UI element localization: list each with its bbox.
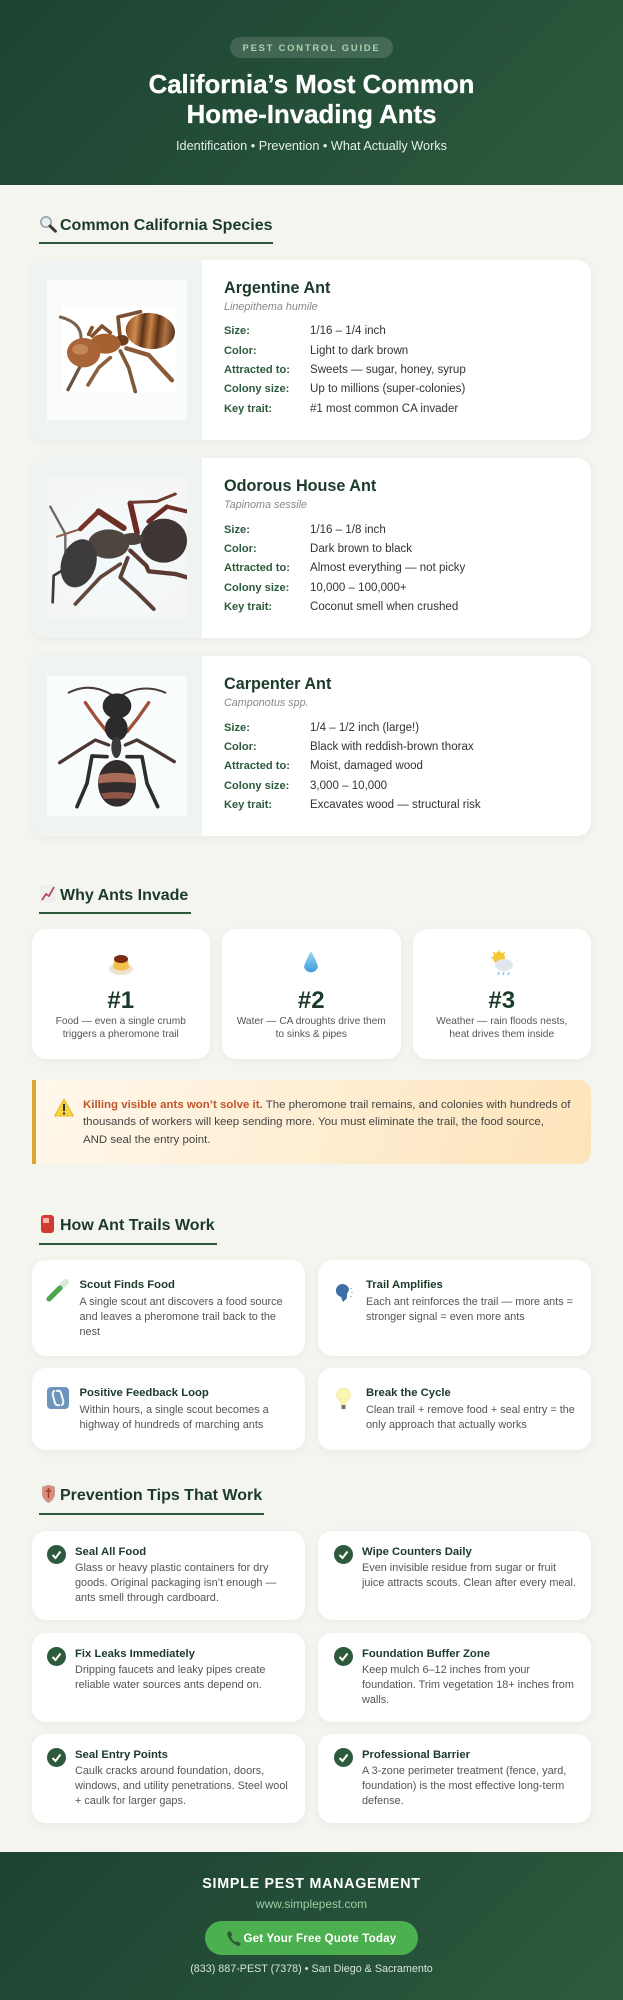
species card: argentine ant bbox=[32, 260, 591, 440]
facts: color: Color: bbox=[224, 344, 257, 356]
reason text bbox=[56, 1016, 186, 1040]
reason text bbox=[236, 1016, 386, 1040]
icon: sun behind rain cloud bbox=[491, 950, 513, 976]
button text: Get Your Free Quote Today bbox=[244, 1932, 396, 1945]
ant illustration: odorous house ant bbox=[49, 492, 187, 612]
facts: attracted to: Attracted to: bbox=[224, 760, 290, 772]
icon: check bbox=[47, 1545, 66, 1564]
species card: odorous house ant bbox=[32, 458, 591, 638]
facts: key trait: Key trait: bbox=[224, 601, 272, 613]
icon: check bbox=[334, 1545, 353, 1564]
step text: only approach that actually works bbox=[366, 1419, 527, 1431]
scientific name: Linepithema humile bbox=[224, 300, 318, 312]
step text: A single scout ant discovers a food source bbox=[80, 1296, 283, 1308]
step text: Within hours, a single scout becomes a bbox=[80, 1404, 269, 1416]
warning text: AND seal the entry point. bbox=[83, 1134, 210, 1146]
company name: SIMPLE PEST MANAGEMENT bbox=[202, 1876, 421, 1892]
tip text bbox=[362, 1562, 576, 1589]
title: California’s Most Common bbox=[149, 71, 474, 99]
icon: check bbox=[47, 1748, 66, 1767]
tip text: goods. Original packaging isn’t enough — bbox=[75, 1577, 276, 1589]
value: Black with reddish-brown thorax bbox=[310, 741, 474, 753]
icon: chart bbox=[40, 885, 56, 902]
tip text: A 3-zone perimeter treatment (fence, yard, bbox=[362, 1764, 566, 1776]
species card: carpenter ant bbox=[32, 656, 591, 836]
value: Moist, damaged wood bbox=[310, 760, 423, 772]
tip text: + caulk for larger gaps. bbox=[75, 1795, 186, 1807]
tip text: Keep mulch 6–12 inches from your bbox=[362, 1664, 530, 1676]
section heading: prevention tips that work bbox=[39, 1484, 264, 1514]
scientific name: Camponotus spp. bbox=[224, 697, 309, 709]
step text: Clean trail + remove food + seal entry = the bbox=[366, 1404, 575, 1416]
tip text: Dripping faucets and leaky pipes create bbox=[75, 1664, 265, 1676]
facts: color: Color: bbox=[224, 543, 257, 555]
step card: scout finds food bbox=[32, 1260, 305, 1356]
section heading: why ants invade bbox=[39, 884, 190, 914]
reason text: Food — even a single crumb bbox=[56, 1016, 186, 1027]
tip text: juice attracts scouts. Clean after every meal. bbox=[362, 1577, 576, 1589]
icon: loop button bbox=[47, 1387, 69, 1409]
value: Coconut smell when crushed bbox=[310, 601, 458, 613]
step title: Break the Cycle bbox=[366, 1387, 451, 1399]
badge: pest control guide bbox=[230, 37, 393, 58]
contact details: (833) 887-PEST (7378) • San Diego & Sacramento bbox=[190, 1963, 433, 1975]
step text: nest bbox=[80, 1326, 100, 1338]
icon: water drop bbox=[304, 951, 318, 972]
subtitle: Identification • Prevention • What Actually Works bbox=[176, 139, 447, 153]
step card: positive feedback loop bbox=[32, 1368, 305, 1450]
step text: stronger signal = even more ants bbox=[366, 1311, 525, 1323]
icon: red alarm bbox=[41, 1215, 54, 1233]
footer bbox=[0, 1852, 623, 2000]
tip title: Professional Barrier bbox=[362, 1748, 470, 1760]
tip text: Glass or heavy plastic containers for dry bbox=[75, 1562, 268, 1574]
tip title: Fix Leaks Immediately bbox=[75, 1648, 195, 1660]
step text bbox=[80, 1404, 269, 1431]
facts: size: Size: bbox=[224, 722, 250, 734]
section heading: common california species bbox=[39, 214, 273, 244]
facts: attracted to: Attracted to: bbox=[224, 562, 290, 574]
tip text: Even invisible residue from sugar or fruit bbox=[362, 1562, 556, 1574]
ant illustration: argentine ant bbox=[47, 280, 187, 420]
value: Excavates wood — structural risk bbox=[310, 799, 481, 811]
facts: size: Size: bbox=[224, 325, 250, 337]
value: Sweets — sugar, honey, syrup bbox=[310, 364, 466, 376]
tip card: seal all food bbox=[32, 1530, 305, 1620]
reason text: heat drives them inside bbox=[449, 1028, 554, 1040]
icon: shield bbox=[42, 1485, 55, 1503]
reason card: food bbox=[32, 929, 210, 1059]
call to action button bbox=[204, 1921, 418, 1955]
icon: warning triangle bbox=[54, 1098, 74, 1116]
heading text: Prevention Tips That Work bbox=[60, 1487, 262, 1504]
tip text bbox=[75, 1764, 288, 1807]
image panel bbox=[32, 458, 202, 638]
rank: #2 bbox=[298, 987, 325, 1014]
facts: colony size: Colony size: bbox=[224, 780, 289, 792]
tip card: fix leaks immediately bbox=[32, 1632, 305, 1722]
facts: color: Color: bbox=[224, 741, 257, 753]
icon: custard bbox=[109, 955, 133, 975]
badge: pest control guide: PEST CONTROL GUIDE bbox=[243, 42, 380, 53]
icon: magnifying glass bbox=[40, 216, 57, 233]
icon: check bbox=[334, 1748, 353, 1767]
heading text: Common California Species bbox=[60, 216, 272, 234]
icon: speaking head bbox=[336, 1284, 353, 1302]
tip text bbox=[362, 1764, 566, 1807]
step title: Positive Feedback Loop bbox=[80, 1387, 209, 1399]
rank: #1 bbox=[107, 987, 134, 1014]
tip card: seal entry points bbox=[32, 1734, 305, 1823]
warning text bbox=[83, 1098, 570, 1146]
heading text: How Ant Trails Work bbox=[60, 1217, 215, 1234]
warning text: Killing visible ants won’t solve it. The pheromone trail remains, and colonies with hundreds of bbox=[83, 1098, 570, 1110]
reason text bbox=[436, 1016, 567, 1040]
tip text: windows, and utility penetrations. Steel wool bbox=[75, 1780, 288, 1792]
scientific name: Tapinoma sessile bbox=[224, 499, 307, 511]
tip text: ants smell through cardboard. bbox=[75, 1592, 219, 1604]
value: Light to dark brown bbox=[310, 344, 408, 356]
reason card: weather bbox=[412, 929, 591, 1059]
value: 10,000 – 100,000+ bbox=[310, 582, 407, 594]
facts: colony size: Colony size: bbox=[224, 383, 289, 395]
website: www.simplepest.com bbox=[256, 1897, 367, 1911]
ant name: Argentine Ant bbox=[224, 278, 330, 296]
facts: colony size: Colony size: bbox=[224, 582, 289, 594]
tip text: reliable water sources ants depend on. bbox=[75, 1679, 262, 1691]
image panel bbox=[32, 656, 202, 836]
step text bbox=[366, 1404, 575, 1431]
icon: phone bbox=[227, 1931, 241, 1946]
tip title: Wipe Counters Daily bbox=[362, 1546, 472, 1558]
reason text: Weather — rain floods nests, bbox=[436, 1016, 567, 1027]
tip title: Foundation Buffer Zone bbox=[362, 1648, 490, 1660]
value: Dark brown to black bbox=[310, 543, 412, 555]
reason text: Water — CA droughts drive them bbox=[237, 1016, 386, 1027]
warning text: thousands of workers will keep sending more. You must eliminate the trail, the food source, bbox=[83, 1116, 544, 1128]
tip text bbox=[75, 1562, 276, 1604]
step title: Trail Amplifies bbox=[366, 1279, 443, 1291]
value: 3,000 – 10,000 bbox=[310, 780, 387, 792]
icon: green test tube bbox=[46, 1279, 69, 1302]
step card: break the cycle bbox=[318, 1368, 591, 1450]
warning callout bbox=[32, 1080, 591, 1164]
value: 1/4 – 1/2 inch (large!) bbox=[310, 722, 419, 734]
step text bbox=[366, 1296, 573, 1323]
icon: check bbox=[334, 1647, 353, 1666]
image panel bbox=[32, 260, 202, 440]
tip text: foundation) is the most effective long-term bbox=[362, 1780, 564, 1792]
reason card: water bbox=[222, 929, 400, 1059]
step card: trail amplifies bbox=[318, 1260, 591, 1356]
step text bbox=[80, 1296, 283, 1338]
value: #1 most common CA invader bbox=[310, 402, 458, 414]
tip card: foundation buffer zone bbox=[318, 1632, 591, 1722]
tip text: walls. bbox=[362, 1694, 389, 1706]
step text: and leaves a pheromone trail back to the bbox=[80, 1311, 276, 1323]
ant name: Carpenter Ant bbox=[224, 675, 331, 693]
tip text bbox=[362, 1664, 574, 1706]
facts: attracted to: Attracted to: bbox=[224, 364, 290, 376]
facts: key trait: Key trait: bbox=[224, 402, 272, 414]
reason text: triggers a pheromone trail bbox=[63, 1028, 179, 1040]
step text: highway of hundreds of marching ants bbox=[80, 1419, 263, 1431]
icon: check bbox=[47, 1647, 66, 1666]
icon: light bulb bbox=[336, 1388, 351, 1409]
tip card: professional barrier bbox=[318, 1734, 591, 1823]
ant illustration: carpenter ant bbox=[47, 676, 187, 816]
title: Home-Invading Ants bbox=[187, 101, 436, 129]
facts: size: Size: bbox=[224, 524, 250, 536]
rank: #3 bbox=[488, 987, 515, 1014]
value: Almost everything — not picky bbox=[310, 562, 465, 574]
tip text: foundation. Trim vegetation 18+ inches from bbox=[362, 1679, 574, 1691]
tip text bbox=[75, 1664, 265, 1691]
reason text: to sinks & pipes bbox=[276, 1028, 347, 1040]
tip text: defense. bbox=[362, 1795, 404, 1807]
header banner bbox=[0, 0, 623, 185]
tip card: wipe counters daily bbox=[318, 1530, 591, 1620]
tip title: Seal Entry Points bbox=[75, 1748, 168, 1760]
title bbox=[149, 71, 474, 129]
value: 1/16 – 1/8 inch bbox=[310, 524, 386, 536]
heading text: Why Ants Invade bbox=[60, 886, 188, 904]
tip title: Seal All Food bbox=[75, 1546, 146, 1558]
step text: Each ant reinforces the trail — more ants = bbox=[366, 1296, 573, 1308]
tip text: Caulk cracks around foundation, doors, bbox=[75, 1764, 264, 1776]
ant name: Odorous House Ant bbox=[224, 477, 376, 495]
value: 1/16 – 1/4 inch bbox=[310, 325, 386, 337]
section heading: how ant trails work bbox=[39, 1214, 216, 1244]
value: Up to millions (super-colonies) bbox=[310, 383, 465, 395]
step title: Scout Finds Food bbox=[80, 1279, 175, 1291]
facts: key trait: Key trait: bbox=[224, 799, 272, 811]
